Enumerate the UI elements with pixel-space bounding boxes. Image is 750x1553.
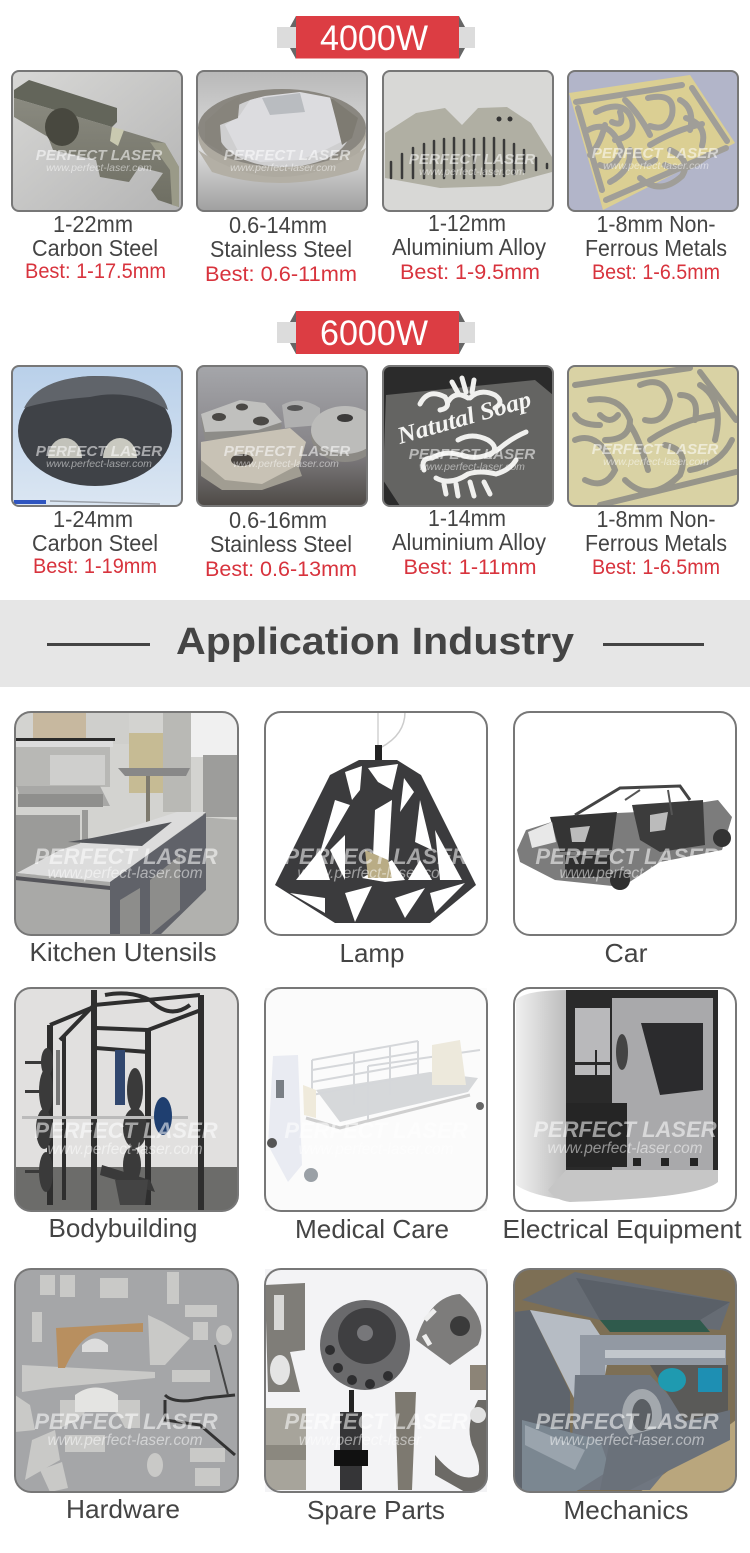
heading: 6000W banner: 6000W (320, 314, 428, 353)
panel: mechanics machine photo: PERFECT LASER (535, 1409, 719, 1434)
text: 6000W aluminium alloy capacity (392, 505, 546, 579)
panel: 4000W carbon steel sample (12, 71, 182, 211)
text: 6000W non-ferrous metals capacity: Best: 1-6.5mm (592, 556, 720, 579)
panel: 6000W aluminium alloy sample: www.perfect-laser.com (419, 461, 525, 473)
panel: lamp photo (265, 712, 487, 935)
text: 6000W aluminium alloy capacity: 1-14mm (428, 505, 506, 531)
text: 6000W non-ferrous metals capacity: 1-8mm Non- (596, 506, 716, 532)
panel: 4000W stainless steel sample: PERFECT LASER (224, 147, 350, 164)
label: Lamp: Lamp (340, 938, 404, 968)
text: 4000W stainless steel capacity: Stainless Steel (210, 236, 352, 262)
panel: mechanics machine photo: www.perfect-laser.com (549, 1432, 705, 1449)
text: 4000W non-ferrous metals capacity: Best: 1-6.5mm (592, 261, 720, 284)
text: 6000W stainless steel capacity: Stainless Steel (210, 531, 352, 557)
text: 6000W stainless steel capacity (205, 507, 357, 581)
text: 4000W aluminium alloy capacity: Aluminium Alloy (392, 234, 546, 260)
text: 6000W stainless steel capacity: Best: 0.6-13mm (205, 558, 357, 581)
panel: 6000W stainless steel sample: www.perfect-laser.com (233, 458, 339, 470)
text: 4000W carbon steel capacity (25, 211, 166, 283)
text: 4000W stainless steel capacity: Best: 0.6-11mm (205, 263, 357, 286)
label: Medical Care: Medical Care (295, 1214, 449, 1244)
text: 6000W carbon steel capacity: Best: 1-19mm (33, 555, 157, 578)
label: Electrical Equipment: Electrical Equipment (502, 1214, 742, 1244)
panel: 4000W non-ferrous metals sample: PERFECT LASER (592, 145, 718, 162)
panel: spare parts photo: PERFECT LASER (284, 1409, 468, 1434)
panel: 4000W carbon steel sample: PERFECT LASER (36, 147, 162, 164)
text: 4000W non-ferrous metals capacity (585, 211, 727, 284)
label: Kitchen Utensils: Kitchen Utensils (30, 937, 216, 967)
text: 4000W stainless steel capacity (205, 212, 357, 286)
panel: kitchen utensils photo: PERFECT LASER (34, 844, 218, 869)
panel: hardware parts photo: www.perfect-laser.com (47, 1432, 203, 1449)
panel: 4000W non-ferrous metals sample: www.perfect-laser.com (603, 160, 709, 172)
heading: Application Industry band: Application Industry (176, 621, 574, 663)
panel: hardware parts photo: PERFECT LASER (34, 1409, 218, 1434)
text: 6000W aluminium alloy capacity: Best: 1-11mm (404, 556, 536, 579)
text: 4000W non-ferrous metals capacity: 1-8mm Non- (596, 211, 716, 237)
panel: 4000W aluminium alloy sample: www.perfect-laser.com (419, 166, 525, 178)
panel: electrical equipment case photo (514, 988, 736, 1211)
text: 4000W carbon steel capacity: Best: 1-17.5mm (25, 260, 166, 283)
panel: 4000W aluminium alloy sample: PERFECT LASER (409, 151, 535, 168)
panel: 6000W carbon steel sample: www.perfect-laser.com (46, 458, 152, 470)
panel: 6000W aluminium alloy sample: Natutal Soap (393, 387, 534, 450)
panel: 4000W non-ferrous metals sample (568, 71, 738, 211)
heading: 4000W banner: 4000W (320, 19, 428, 58)
panel: spare parts photo (265, 1269, 487, 1492)
panel: 4000W stainless steel sample (197, 71, 367, 211)
panel: lamp photo: PERFECT LASER (284, 844, 468, 869)
panel: 6000W stainless steel sample: PERFECT LASER (224, 443, 350, 460)
label: Mechanics: Mechanics (564, 1495, 688, 1525)
panel: 6000W aluminium alloy sample: PERFECT LASER (409, 446, 535, 463)
text: 6000W carbon steel capacity: 1-24mm (53, 506, 133, 532)
panel: lamp photo: www.perfect-laser.com (297, 865, 453, 882)
text: 4000W carbon steel capacity: Carbon Steel (32, 235, 158, 261)
panel: 6000W non-ferrous metals sample: www.perfect-laser.com (603, 456, 709, 468)
text: 4000W carbon steel capacity: 1-22mm (53, 211, 133, 237)
label: Car: Car (604, 938, 648, 968)
panel: electrical equipment case photo: www.perfect-laser.com (547, 1140, 703, 1157)
text: 6000W non-ferrous metals capacity (585, 506, 727, 579)
text: 6000W aluminium alloy capacity: Aluminium Alloy (392, 529, 546, 555)
panel: spare parts photo: www.perfect-laser (299, 1432, 422, 1449)
panel: 6000W non-ferrous metals sample (568, 366, 738, 506)
panel: car chassis photo (514, 712, 736, 935)
panel: hardware parts photo (15, 1269, 238, 1492)
label: Hardware: Hardware (66, 1494, 180, 1524)
panel: 4000W carbon steel sample: www.perfect-laser.com (46, 162, 152, 174)
panel: medical bed photo: www.perfect-laser.com (298, 1141, 454, 1158)
text: 6000W carbon steel capacity (32, 506, 158, 578)
panel: bodybuilding rack photo: www.perfect-laser.com (47, 1141, 203, 1158)
label: Spare Parts: Spare Parts (307, 1495, 445, 1525)
panel: mechanics machine photo (514, 1269, 736, 1492)
text: 4000W aluminium alloy capacity: Best: 1-9.5mm (400, 261, 540, 284)
panel: 6000W carbon steel sample: PERFECT LASER (36, 443, 162, 460)
panel: kitchen utensils photo: www.perfect-laser.com (47, 865, 203, 882)
panel: car chassis photo: www.perfect-la (560, 865, 661, 882)
panel: 6000W carbon steel sample (12, 366, 182, 506)
panel: 6000W non-ferrous metals sample: PERFECT LASER (592, 441, 718, 458)
panel: electrical equipment case photo: PERFECT LASER (533, 1117, 717, 1142)
heading: 4000W banner (277, 16, 475, 59)
panel: kitchen utensils photo (15, 712, 238, 935)
panel: medical bed photo (265, 988, 487, 1211)
text: 6000W non-ferrous metals capacity: Ferrous Metals (585, 530, 727, 556)
panel: car chassis photo: PERFECT LASER (535, 844, 719, 869)
panel: 6000W aluminium alloy sample (383, 366, 553, 506)
panel: 6000W stainless steel sample (197, 366, 379, 506)
text: 6000W carbon steel capacity: Carbon Steel (32, 530, 158, 556)
text: 4000W aluminium alloy capacity: 1-12mm (428, 210, 506, 236)
panel: bodybuilding rack photo (15, 988, 238, 1211)
panel: medical bed photo: PERFECT LASER (284, 1118, 468, 1143)
heading: 6000W banner (277, 311, 475, 354)
text: 6000W stainless steel capacity: 0.6-16mm (229, 507, 327, 533)
text: 4000W stainless steel capacity: 0.6-14mm (229, 212, 327, 238)
text: 4000W aluminium alloy capacity (392, 210, 546, 284)
heading: Application Industry band (0, 600, 750, 687)
panel: bodybuilding rack photo: PERFECT LASER (34, 1118, 218, 1143)
label: Bodybuilding: Bodybuilding (48, 1213, 198, 1243)
text: 4000W non-ferrous metals capacity: Ferrous Metals (585, 235, 727, 261)
panel: 4000W aluminium alloy sample (383, 71, 553, 211)
panel: 4000W stainless steel sample: www.perfect-laser.com (230, 162, 336, 174)
